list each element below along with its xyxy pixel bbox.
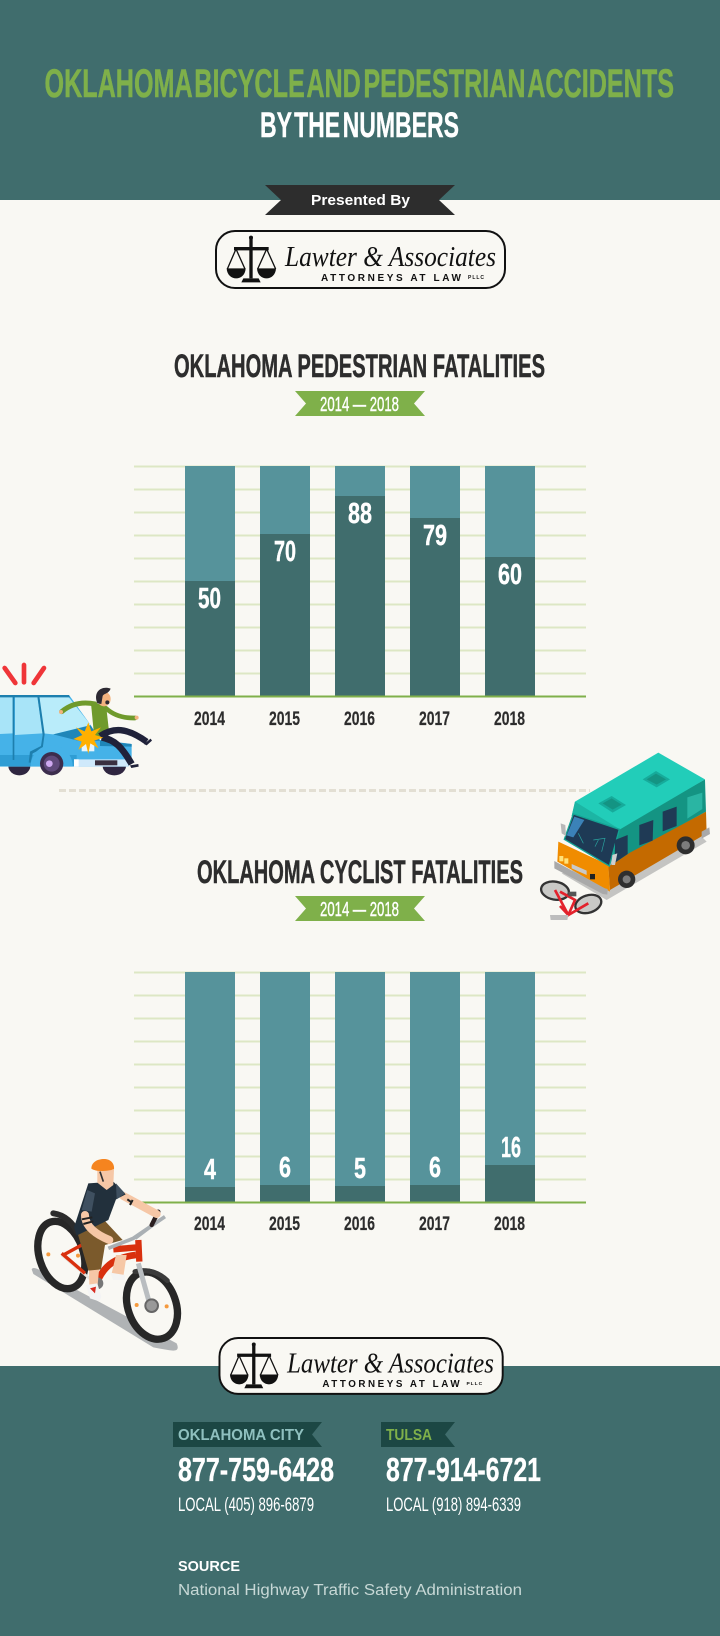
bar chart: cyclist fatalities: 2014 [194, 1213, 225, 1235]
title [44, 62, 674, 145]
bar chart: cyclist fatalities: 2017 [419, 1213, 450, 1235]
bar chart: cyclist fatalities: 2018 [494, 1213, 525, 1235]
bar chart: cyclist fatalities: 16 [501, 1132, 521, 1164]
ribbon: 2014-2018 cyclist [295, 896, 425, 921]
footer band [0, 1366, 720, 1636]
logo: footer [219, 1338, 503, 1394]
ribbon: 2014-2018 cyclist: 2014 — 2018 [320, 899, 399, 921]
ribbon: 2014-2018 pedestrian: 2014 — 2018 [320, 394, 399, 416]
contact: Oklahoma City: 877-759-6428 [178, 1452, 334, 1489]
logo: top [216, 231, 505, 288]
bar chart: pedestrian fatalities: 2015 [269, 708, 300, 730]
logo: footer: Lawter & Associates [286, 1348, 494, 1379]
icon: car hitting pedestrian [0, 665, 152, 775]
contact: Tulsa: TULSA [386, 1427, 432, 1444]
contact: Oklahoma City [173, 1422, 334, 1516]
source [178, 1558, 522, 1599]
bar chart: cyclist fatalities: 2016 [344, 1213, 375, 1235]
bar chart: pedestrian fatalities: 2014 [194, 708, 225, 730]
logo: top: ATTORNEYS AT LAW [321, 273, 462, 284]
title: BY THE NUMBERS [260, 105, 459, 145]
bar chart: pedestrian fatalities: 50 [198, 583, 221, 615]
bar chart: cyclist fatalities: 6 [279, 1152, 291, 1184]
bar chart: pedestrian fatalities: 70 [274, 536, 296, 568]
bar chart: pedestrian fatalities: 79 [423, 520, 447, 552]
bar chart: cyclist fatalities [134, 972, 586, 1235]
bar chart: cyclist fatalities: 5 [354, 1153, 366, 1185]
logo: top: Lawter & Associates [284, 241, 496, 273]
icon: van and crashed bicycle [540, 753, 710, 920]
bar chart: cyclist fatalities: 4 [204, 1154, 216, 1186]
logo: footer: PLLC [466, 1381, 483, 1387]
bar chart: pedestrian fatalities: 88 [348, 498, 372, 530]
bar chart: cyclist fatalities: 6 [429, 1152, 441, 1184]
bar chart: cyclist fatalities: 2015 [269, 1213, 300, 1235]
bar chart: pedestrian fatalities: 2018 [494, 708, 525, 730]
header band [0, 0, 720, 200]
source: SOURCE [178, 1558, 240, 1575]
bar chart: pedestrian fatalities: 2016 [344, 708, 375, 730]
presented by ribbon: Presented By [311, 192, 411, 209]
divider [59, 789, 590, 792]
ribbon: 2014-2018 pedestrian [295, 391, 425, 416]
bar chart: pedestrian fatalities [134, 466, 586, 730]
source: National Highway Traffic Safety Administration [178, 1582, 522, 1599]
contact: Oklahoma City: LOCAL (405) 896-6879 [178, 1494, 314, 1516]
presented by ribbon [265, 185, 455, 215]
bar chart: pedestrian fatalities: 2017 [419, 708, 450, 730]
bar chart: pedestrian fatalities: 60 [498, 559, 522, 591]
logo: top: PLLC [468, 275, 484, 281]
contact: Tulsa: 877-914-6721 [386, 1452, 541, 1489]
contact: Oklahoma City: OKLAHOMA CITY [178, 1427, 305, 1444]
contact: Tulsa [381, 1422, 541, 1516]
icon: cyclist [30, 1159, 186, 1351]
contact: Tulsa: LOCAL (918) 894-6339 [386, 1494, 521, 1516]
logo: footer: ATTORNEYS AT LAW [322, 1379, 460, 1390]
heading: cyclist fatalities: OKLAHOMA CYCLIST FATALITIES [197, 854, 523, 890]
